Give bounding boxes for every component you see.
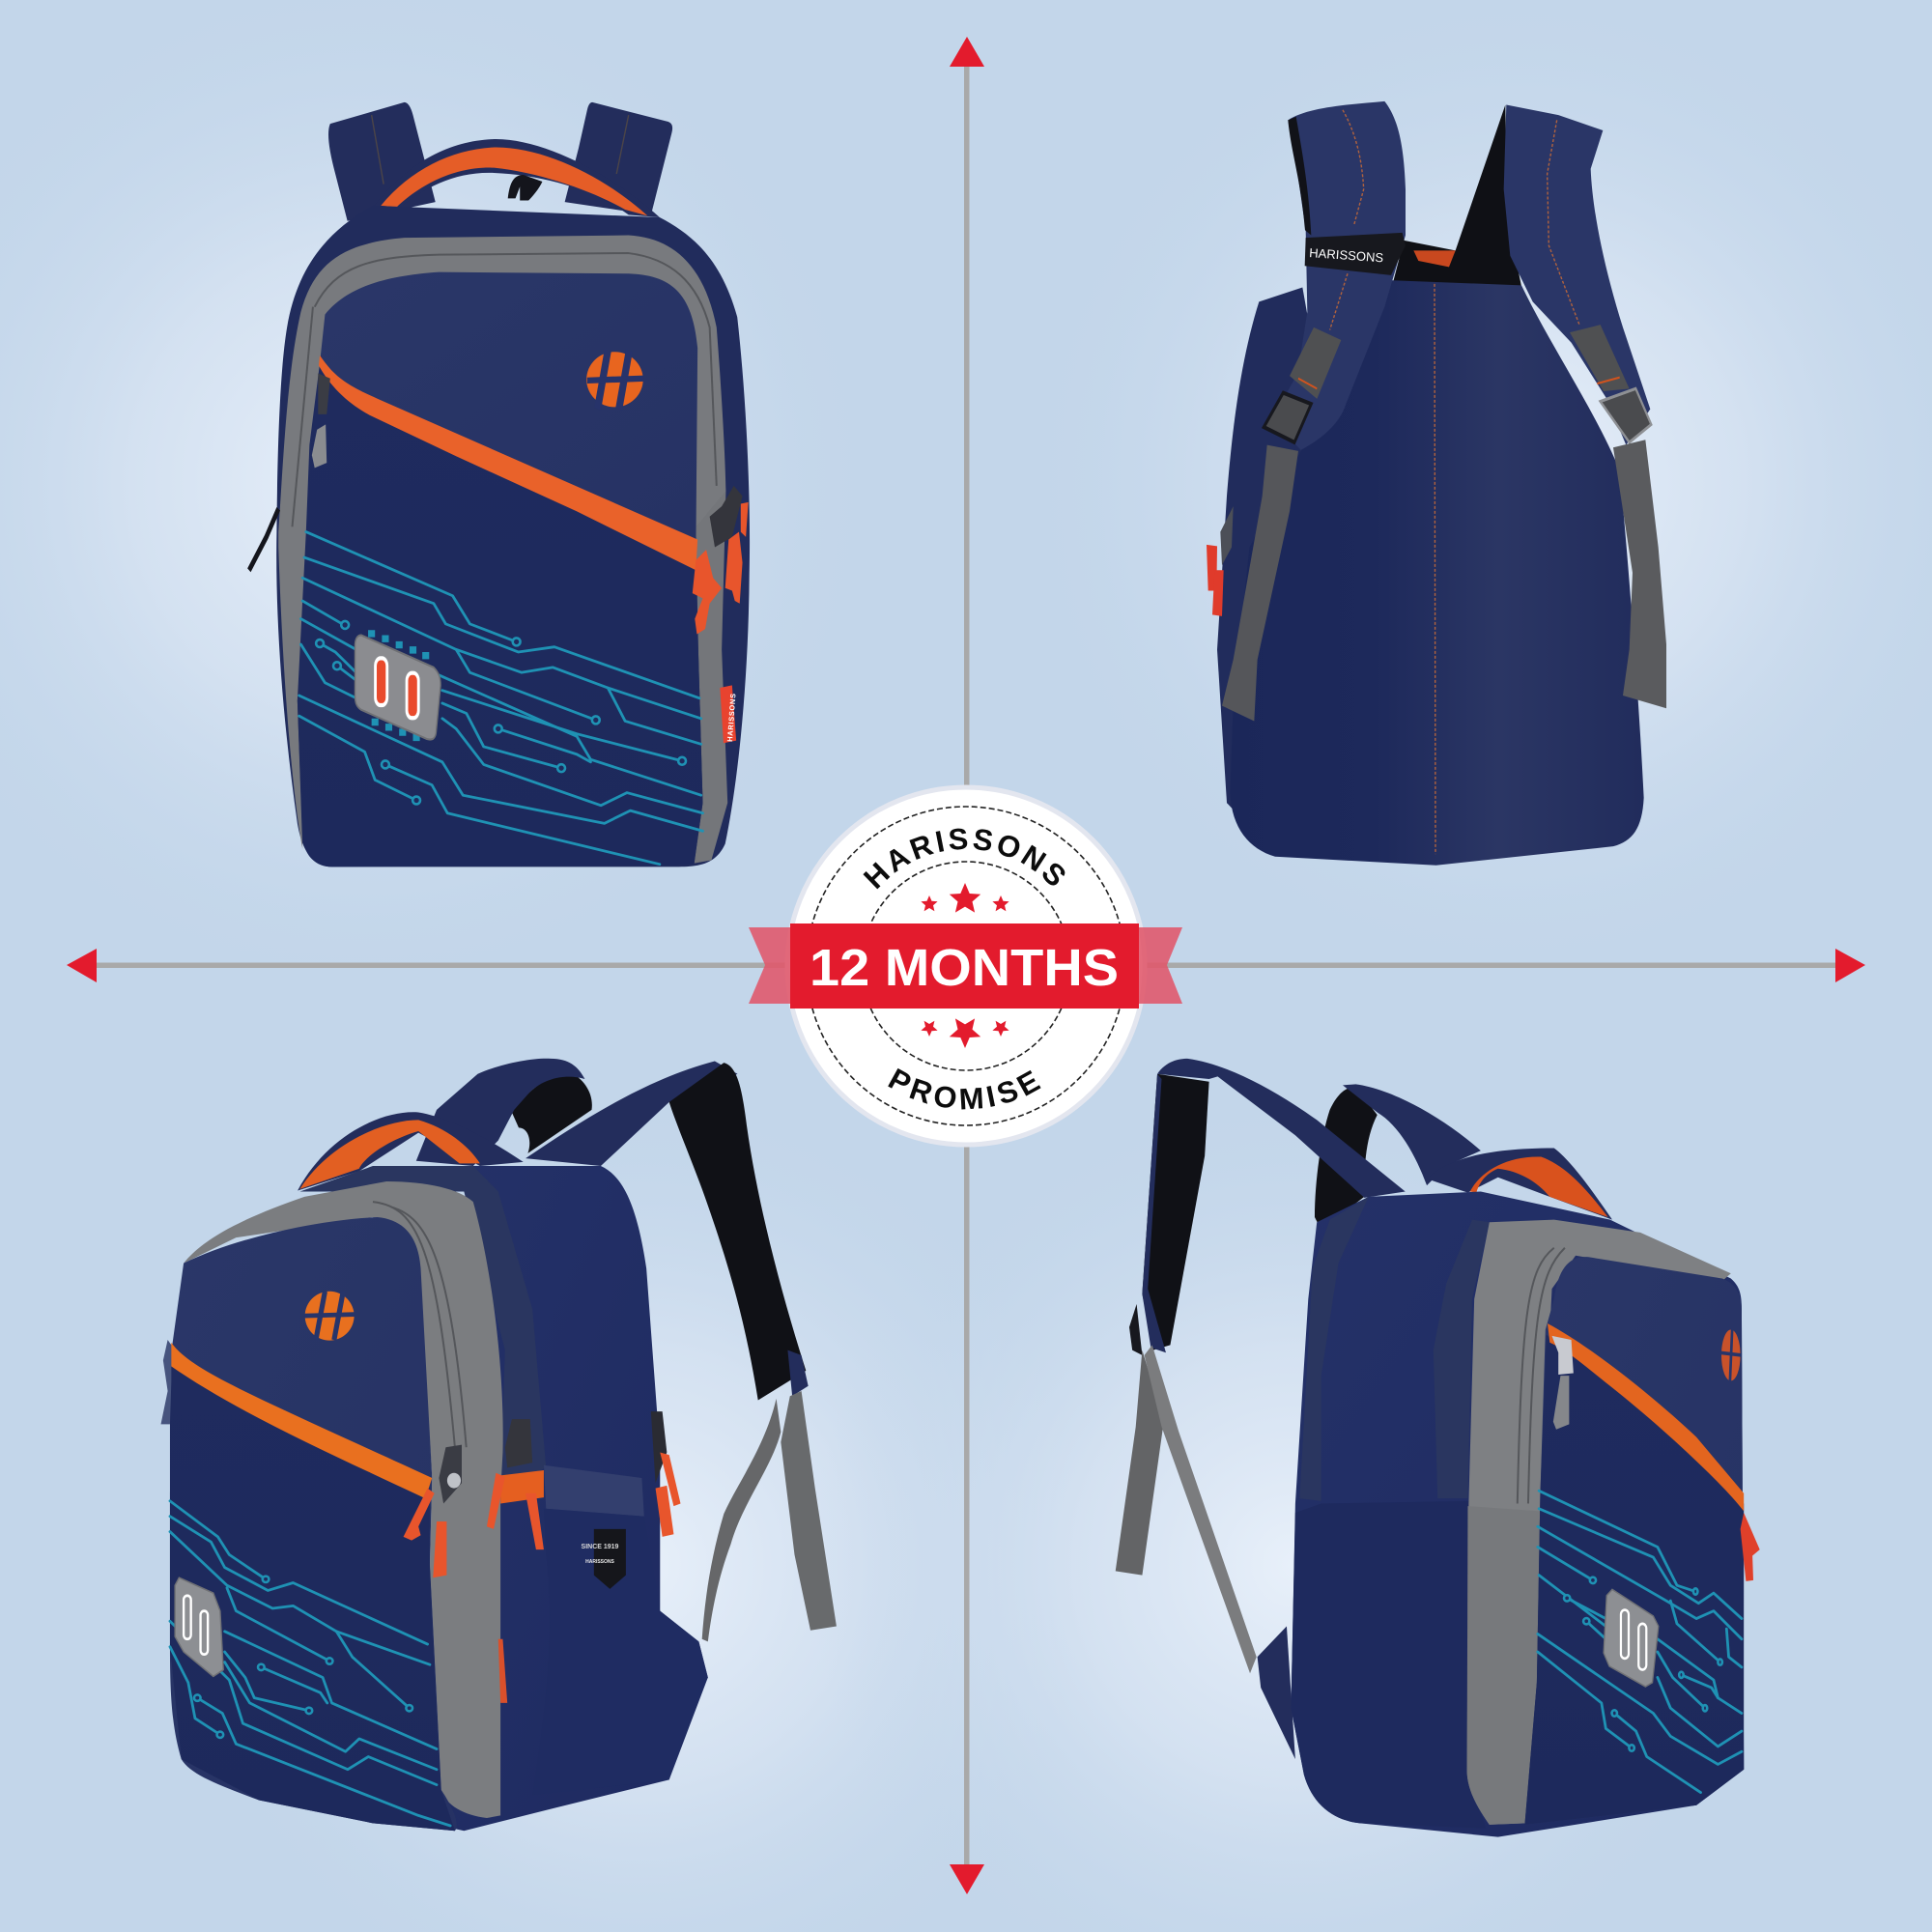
front panel [170,1217,457,1831]
circuit lines [299,532,702,865]
dark seams [1299,1197,1490,1501]
brand curved text: HARISSONS [864,829,1065,889]
arrow: top [950,37,984,67]
webbing [702,1350,837,1641]
left zip pull [161,1340,171,1424]
left shoulder strap [1272,101,1406,450]
lower panel shade [1524,1335,1744,1825]
right webbing [1570,325,1666,708]
zipper pull [1552,1336,1574,1430]
ribbon text: 12 MONTHS [810,939,1119,997]
red pull [1741,1513,1760,1581]
front lower panel [298,363,702,867]
front panel [1524,1257,1744,1825]
shield brand text: HARISSONS [585,1559,615,1565]
zipper pulls [312,373,749,634]
orange zipper [1548,1323,1744,1511]
backpack: left three-quarter view [161,1059,837,1831]
arrow: left [67,949,97,982]
back panel [1230,280,1644,866]
badge [749,784,1182,1148]
inner dashed ring [862,862,1070,1070]
arrow: right [1835,949,1865,982]
buckle [1129,1304,1142,1355]
horizontal axis line [93,962,1839,968]
vertical axis line [964,64,970,1868]
logo [586,351,644,410]
tag text: HARISSONS [725,694,737,742]
stars: bottom [921,1018,1009,1048]
promise curved text: PROMISE [888,1068,1041,1109]
outer dashed ring [807,807,1125,1125]
grey piping [184,1181,503,1818]
ribbon [790,923,1139,1009]
zip band [299,1166,546,1489]
side zipper pulls [1207,506,1234,616]
strap label text: HARISSONS [1309,245,1384,265]
shoulder straps [328,102,672,221]
backpack: front view [249,102,750,867]
logo [1720,1329,1742,1380]
main body [1291,1192,1744,1837]
arrow: bottom [950,1864,984,1894]
shield badge [594,1529,626,1589]
chip patch [1604,1589,1659,1687]
webbing [1116,1345,1257,1673]
grey piping [1467,1220,1731,1825]
circuit lines [170,1501,450,1826]
stars: top [921,883,1009,913]
handle [298,1112,524,1190]
handle [1427,1149,1612,1220]
orange zipper [319,355,697,570]
name band [1305,233,1406,275]
circuit lines [1538,1491,1742,1793]
side body [1217,288,1340,854]
near strap [526,1062,806,1401]
grey piping [278,236,727,864]
chip patch [175,1577,223,1676]
orange zipper [170,1343,432,1498]
backpack: back view [1207,101,1666,866]
left webbing [1222,327,1341,721]
rear strap [416,1059,592,1166]
bottom lobe [1258,1627,1295,1759]
logo [304,1292,355,1341]
front upper panel [320,272,697,553]
handle glimpse [1413,250,1456,267]
lower pocket [1291,1501,1486,1829]
side body [441,1166,708,1831]
ribbon tail: right [1139,927,1182,1004]
lower panel shade [170,1352,455,1831]
backpack: right three-quarter view [1116,1059,1760,1837]
chip patch [355,636,440,740]
ribbon tail: left [749,927,790,1004]
shield text: SINCE 1919 [582,1544,619,1550]
side pocket [500,1465,708,1795]
black back padding [1393,105,1521,286]
far strap [1315,1084,1481,1230]
zipper pulls [404,1411,681,1703]
right shoulder strap [1504,105,1650,445]
badge disc [787,787,1145,1145]
near strap [1142,1059,1406,1352]
main body [276,206,750,867]
handle [373,139,660,217]
red side tag [720,685,736,743]
black side zip [249,509,278,570]
